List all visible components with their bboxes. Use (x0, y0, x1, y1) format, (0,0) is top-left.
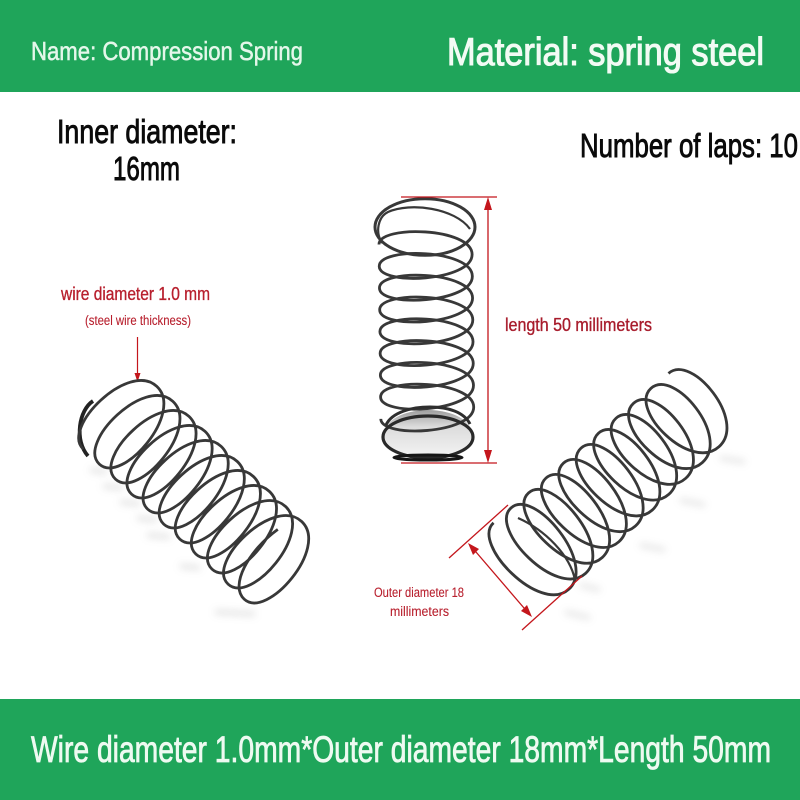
left spring shadow (90, 470, 255, 614)
inner diameter label (57, 113, 237, 187)
wire diameter arrow (134, 337, 140, 382)
inner diameter label: 16mm (113, 150, 180, 187)
outer diameter label: Outer diameter 18 (374, 585, 464, 600)
wire diameter label: (steel wire thickness) (85, 313, 191, 328)
outer diameter dimension arrow (449, 505, 582, 630)
vertical spring (375, 199, 475, 460)
wire diameter label: wire diameter 1.0 mm (60, 283, 210, 304)
footer band (0, 699, 800, 800)
inner diameter label: Inner diameter: (57, 113, 237, 150)
right spring shadow (565, 458, 745, 618)
product name: Name: Compression Spring (31, 36, 303, 66)
right spring (478, 355, 746, 611)
length label: length 50 millimeters (505, 315, 652, 335)
material: Material: spring steel (447, 31, 764, 74)
outer diameter label: millimeters (390, 604, 449, 619)
length dimension arrow (401, 197, 497, 463)
outer diameter label (374, 585, 464, 619)
left spring (68, 365, 325, 613)
wire diameter label (60, 283, 210, 328)
header band (0, 0, 800, 92)
